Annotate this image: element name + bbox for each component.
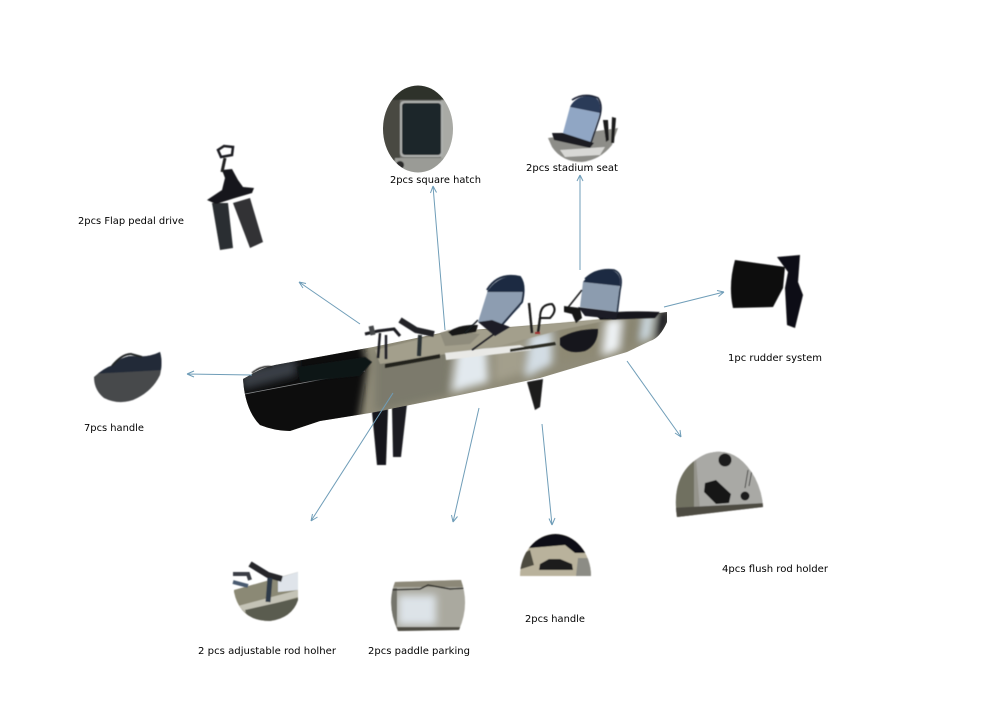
label: pedal drive: 2pcs Flap pedal drive <box>78 216 184 227</box>
main kayak <box>235 270 672 465</box>
arrow: to bow handle <box>187 371 252 377</box>
arrow: to stadium seat <box>577 175 583 270</box>
icon: bow handle <box>93 351 162 403</box>
label: paddle parking: 2pcs paddle parking <box>368 646 470 657</box>
label: side handle: 2pcs handle <box>525 614 585 625</box>
icon: flush rod holder <box>675 451 764 518</box>
rear seat <box>564 270 621 323</box>
icon: rudder system <box>731 255 803 328</box>
kayak deck <box>252 311 660 382</box>
icon: paddle parking <box>390 579 466 632</box>
label: adjustable rod holder: 2 pcs adjustable rod holher <box>198 646 337 657</box>
arrow: to adjustable rod holder <box>311 393 393 521</box>
kayak hull <box>243 312 667 431</box>
arrow: to paddle parking <box>452 408 479 522</box>
icon: pedal drive <box>207 146 263 250</box>
label: bow handle: 7pcs handle <box>84 423 144 434</box>
front seat <box>465 276 555 350</box>
arrow: to pedal drive <box>299 282 360 324</box>
kayak rod holders <box>365 320 434 359</box>
label: stadium seat: 2pcs stadium seat <box>526 163 618 174</box>
label: flush rod holder: 4pcs flush rod holder <box>722 564 829 575</box>
arrow: to side handle <box>542 424 555 525</box>
arrow: to square hatch <box>430 186 445 330</box>
paddle blade <box>560 329 598 352</box>
label: square hatch: 2pcs square hatch <box>390 175 481 186</box>
icon: square hatch <box>383 86 453 172</box>
label: rudder system: 1pc rudder system <box>728 353 822 364</box>
icon: adjustable rod holder <box>233 564 298 625</box>
arrow: to rudder system <box>664 290 724 307</box>
icon: side handle <box>518 532 593 578</box>
icon: stadium seat <box>548 95 620 165</box>
arrow: to flush rod holder <box>627 361 681 437</box>
kayak fins <box>372 379 543 465</box>
